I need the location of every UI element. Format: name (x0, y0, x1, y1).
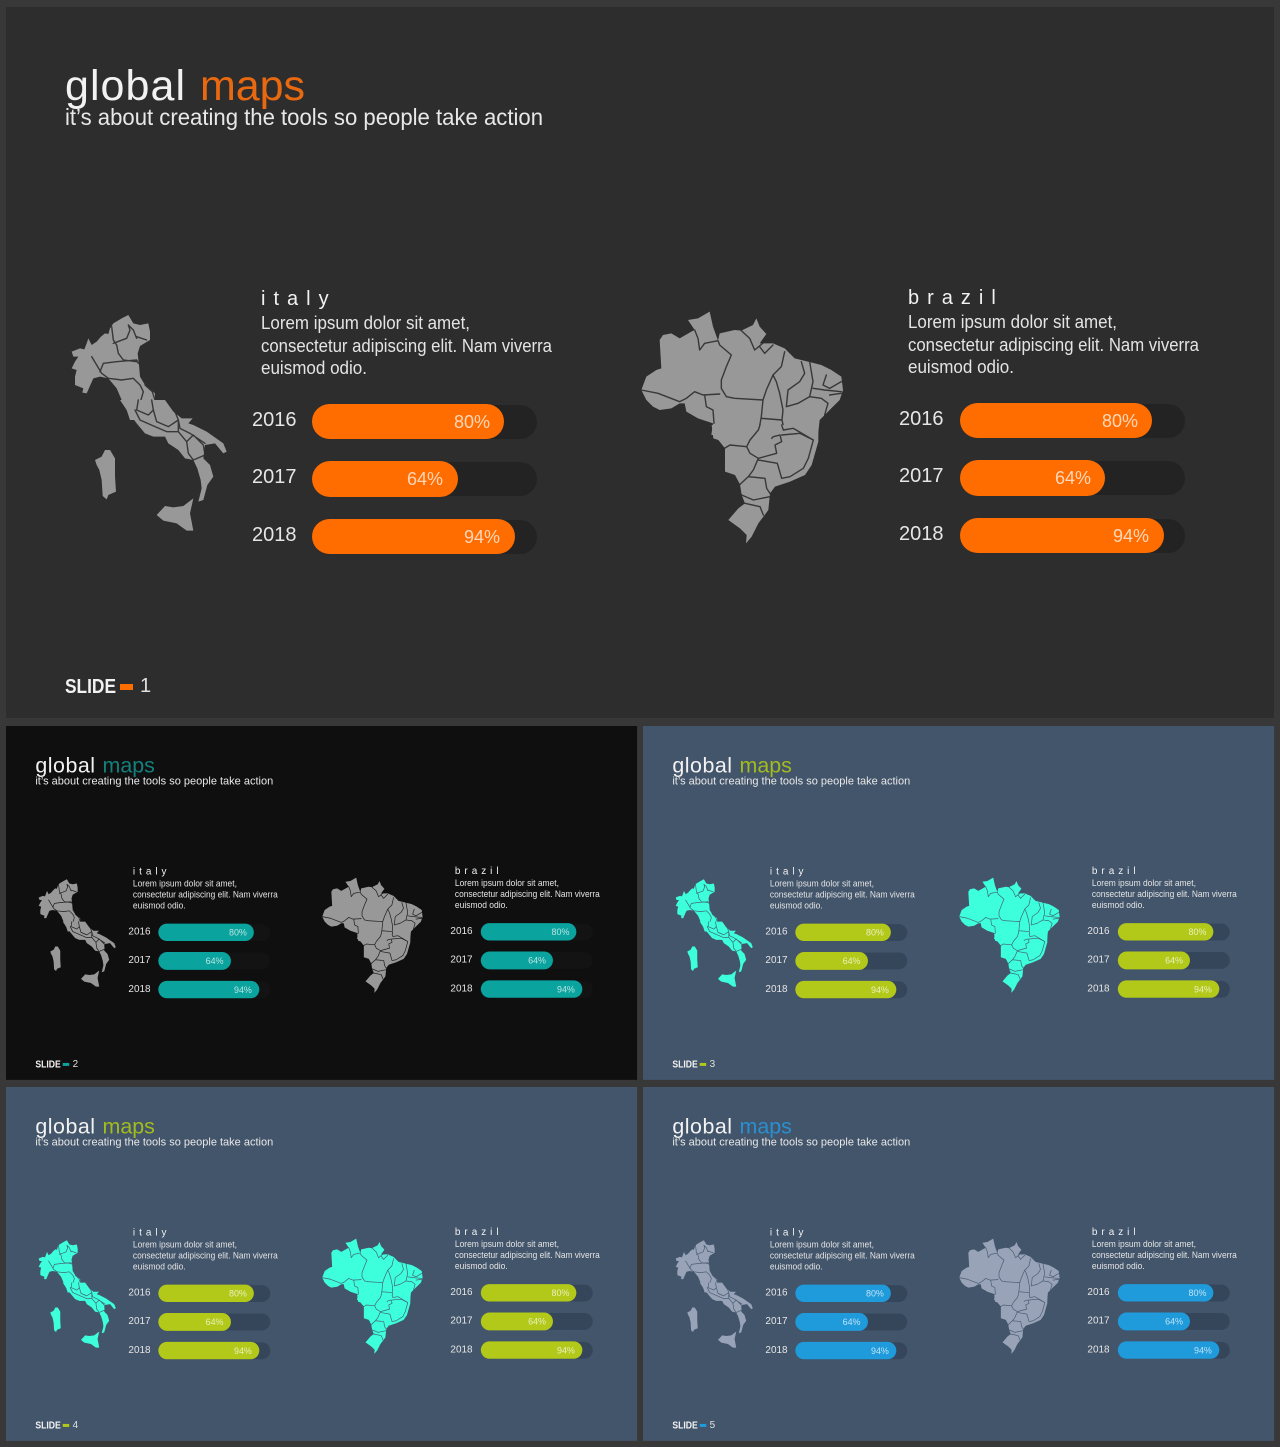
slide label (35, 1420, 79, 1431)
bar chart: brazil: 80% (552, 1288, 569, 1298)
bar chart: brazil: 2016 (450, 926, 473, 937)
slide label: 3 (710, 1059, 716, 1070)
text block: brazil: Lorem ipsum dolor sit amet, (455, 1239, 559, 1249)
slide label: SLIDE (65, 676, 116, 698)
bar chart: brazil: 2018 (450, 1344, 473, 1355)
text block: italy: euismod odio. (261, 358, 367, 378)
bar chart: italy: 2018 (765, 984, 788, 995)
text block: italy: Lorem ipsum dolor sit amet, (133, 1239, 237, 1249)
slide label: 5 (710, 1420, 716, 1431)
bar chart: italy: 94% (871, 985, 889, 995)
bar chart: brazil: 94% (557, 984, 575, 994)
text block: brazil: euismod odio. (455, 1261, 508, 1271)
panel: slide 4 (6, 1087, 637, 1441)
text block: brazil: euismod odio. (1092, 900, 1145, 910)
title: maps (740, 753, 792, 777)
text block: brazil (455, 1239, 600, 1271)
text block: brazil: euismod odio. (1092, 1261, 1145, 1271)
map: italy (676, 1240, 753, 1348)
text block: italy: consectetur adipiscing elit. Nam viverra (770, 1251, 915, 1261)
text block: italy (261, 313, 553, 378)
map: brazil (322, 878, 423, 993)
bar chart: italy: 80% (229, 928, 247, 938)
title (672, 753, 792, 777)
text block: italy: consectetur adipiscing elit. Nam viverra (133, 890, 278, 900)
bar chart: brazil: 2016 (450, 1287, 473, 1298)
map: brazil (959, 1239, 1060, 1354)
bar chart: brazil (450, 1284, 593, 1359)
slide label: SLIDE (672, 1059, 698, 1070)
text block: italy (770, 878, 915, 911)
subtitle: it’s about creating the tools so people take action (35, 1137, 273, 1149)
bar chart: italy: 80% (866, 928, 884, 938)
bar chart: italy (765, 1285, 907, 1359)
bar chart: brazil: 2017 (1087, 954, 1110, 965)
bar chart: brazil: 2017 (899, 465, 944, 487)
text block: italy (133, 878, 278, 911)
bar chart: italy: 64% (843, 956, 861, 966)
bar chart: italy: 2018 (252, 524, 296, 546)
text block: brazil (908, 312, 1200, 377)
bar chart: italy: 64% (843, 1317, 861, 1327)
slide label: 1 (140, 675, 151, 697)
bar chart: italy: 2018 (128, 984, 151, 995)
text block: brazil: euismod odio. (908, 357, 1014, 377)
country heading: italy: italy (133, 866, 171, 877)
title (672, 1114, 792, 1138)
country heading: brazil: brazil (1092, 866, 1140, 877)
bar chart: italy: 64% (206, 1317, 224, 1327)
text block: brazil: consectetur adipiscing elit. Nam viverra (1092, 1250, 1237, 1260)
bar chart: italy (128, 924, 270, 998)
subtitle: it’s about creating the tools so people take action (672, 1137, 910, 1149)
bar chart: italy (765, 924, 907, 998)
text block: brazil: consectetur adipiscing elit. Nam viverra (908, 335, 1200, 355)
bar chart: italy: 2017 (765, 1316, 788, 1327)
country heading: italy: italy (133, 1227, 171, 1238)
bar chart: brazil: 64% (528, 1316, 546, 1326)
text block: italy: consectetur adipiscing elit. Nam viverra (261, 336, 553, 356)
country heading: italy: italy (261, 288, 337, 310)
text block: brazil: consectetur adipiscing elit. Nam viverra (455, 889, 600, 899)
bar chart: italy: 80% (229, 1289, 247, 1299)
bar chart: brazil: 64% (1055, 468, 1091, 488)
bar chart: brazil: 2017 (450, 1315, 473, 1326)
bar chart: italy: 2016 (128, 1288, 151, 1299)
text block: brazil (1092, 1239, 1237, 1271)
bar chart: brazil: 2017 (1087, 1315, 1110, 1326)
title: global (65, 62, 185, 110)
text block: italy: euismod odio. (133, 901, 186, 911)
title (35, 753, 155, 777)
bar chart: italy: 2016 (765, 1288, 788, 1299)
text block: italy: Lorem ipsum dolor sit amet, (261, 313, 470, 333)
text block: brazil: Lorem ipsum dolor sit amet, (908, 312, 1117, 332)
title: maps (200, 62, 305, 110)
bar chart: brazil: 2016 (1087, 926, 1110, 937)
map: italy (39, 879, 116, 987)
title: maps (740, 1114, 792, 1138)
text block: italy: Lorem ipsum dolor sit amet, (770, 878, 874, 888)
bar chart: brazil: 64% (1165, 1316, 1183, 1326)
bar chart: italy: 2018 (765, 1345, 788, 1356)
slide label (672, 1059, 716, 1070)
bar chart: italy: 2016 (765, 927, 788, 938)
text block: italy: euismod odio. (133, 1262, 186, 1272)
map: brazil (959, 878, 1060, 993)
text block: brazil: consectetur adipiscing elit. Nam viverra (1092, 889, 1237, 899)
bar chart: brazil: 2017 (450, 954, 473, 965)
text block: brazil (455, 878, 600, 910)
bar chart: italy: 64% (407, 469, 443, 489)
bar chart: brazil: 80% (552, 927, 569, 937)
map: italy (676, 879, 753, 987)
title (35, 1114, 155, 1138)
panel: slide 3 (643, 726, 1274, 1080)
bar chart: italy: 64% (206, 956, 224, 966)
bar chart: italy: 2016 (128, 927, 151, 938)
text block: italy (133, 1239, 278, 1272)
country heading: brazil: brazil (455, 1227, 503, 1238)
title: maps (103, 1114, 155, 1138)
bar chart: brazil (1087, 923, 1230, 998)
bar chart: brazil: 2018 (1087, 1344, 1110, 1355)
text block: brazil: Lorem ipsum dolor sit amet, (1092, 878, 1196, 888)
text block: brazil: consectetur adipiscing elit. Nam viverra (455, 1250, 600, 1260)
slide label (672, 1420, 716, 1431)
subtitle: it’s about creating the tools so people take action (35, 776, 273, 788)
bar chart: brazil: 2016 (899, 408, 944, 430)
country heading: brazil: brazil (1092, 1227, 1140, 1238)
bar chart: brazil: 80% (1102, 411, 1138, 431)
text block: italy: Lorem ipsum dolor sit amet, (133, 878, 237, 888)
bar chart: brazil: 80% (1189, 927, 1206, 937)
bar chart: italy: 94% (871, 1346, 889, 1356)
bar chart: italy: 80% (866, 1289, 884, 1299)
bar chart: italy: 94% (234, 985, 252, 995)
bar chart: italy: 2018 (128, 1345, 151, 1356)
title: maps (103, 753, 155, 777)
title (65, 62, 305, 110)
panel: slide 2 (6, 726, 637, 1080)
bar chart: brazil: 2018 (450, 983, 473, 994)
bar chart: brazil: 94% (1194, 1345, 1212, 1355)
bar chart: italy: 2017 (765, 955, 788, 966)
bar chart: brazil: 94% (557, 1345, 575, 1355)
slide label (35, 1059, 79, 1070)
bar chart: brazil: 2018 (1087, 983, 1110, 994)
text block: italy: euismod odio. (770, 901, 823, 911)
country heading: brazil: brazil (455, 866, 503, 877)
country heading: brazil: brazil (908, 287, 1004, 309)
bar chart: italy: 80% (454, 412, 490, 432)
bar chart: brazil (450, 923, 593, 998)
text block: italy: euismod odio. (770, 1262, 823, 1272)
bar chart: brazil: 64% (1165, 955, 1183, 965)
slide label (65, 675, 151, 698)
text block: brazil: Lorem ipsum dolor sit amet, (1092, 1239, 1196, 1249)
slide label: 4 (73, 1420, 79, 1431)
country heading: italy: italy (770, 866, 808, 877)
panel: slide 1 (6, 7, 1274, 718)
title: global (672, 753, 732, 777)
bar chart: brazil: 80% (1189, 1288, 1206, 1298)
map: italy (39, 1240, 116, 1348)
bar chart: italy (128, 1285, 270, 1359)
bar chart: brazil: 2016 (1087, 1287, 1110, 1298)
map: brazil (641, 312, 843, 543)
subtitle: it’s about creating the tools so people take action (672, 776, 910, 788)
slide label: 2 (73, 1059, 79, 1070)
text block: brazil: euismod odio. (455, 900, 508, 910)
text block: brazil: Lorem ipsum dolor sit amet, (455, 878, 559, 888)
bar chart: brazil: 2018 (899, 523, 944, 545)
text block: italy: consectetur adipiscing elit. Nam viverra (770, 890, 915, 900)
text block: italy: consectetur adipiscing elit. Nam viverra (133, 1251, 278, 1261)
title: global (672, 1114, 732, 1138)
map: italy (72, 315, 227, 531)
bar chart: brazil: 64% (528, 955, 546, 965)
panel: slide 5 (643, 1087, 1274, 1441)
title: global (35, 753, 95, 777)
text block: brazil (1092, 878, 1237, 910)
title: global (35, 1114, 95, 1138)
bar chart: brazil: 94% (1194, 984, 1212, 994)
bar chart: italy: 2017 (128, 955, 151, 966)
bar chart: brazil (1087, 1284, 1230, 1359)
text block: italy (770, 1239, 915, 1272)
bar chart: italy: 2016 (252, 409, 296, 431)
text block: italy: Lorem ipsum dolor sit amet, (770, 1239, 874, 1249)
bar chart: italy (252, 404, 537, 554)
bar chart: italy: 94% (464, 527, 500, 547)
slide label: SLIDE (35, 1420, 61, 1431)
bar chart: italy: 2017 (252, 466, 296, 488)
slide label: SLIDE (35, 1059, 61, 1070)
country heading: italy: italy (770, 1227, 808, 1238)
bar chart: brazil (899, 403, 1185, 553)
bar chart: italy: 2017 (128, 1316, 151, 1327)
slide label: SLIDE (672, 1420, 698, 1431)
map: brazil (322, 1239, 423, 1354)
bar chart: brazil: 94% (1113, 526, 1149, 546)
bar chart: italy: 94% (234, 1346, 252, 1356)
subtitle: it’s about creating the tools so people take action (65, 104, 543, 130)
